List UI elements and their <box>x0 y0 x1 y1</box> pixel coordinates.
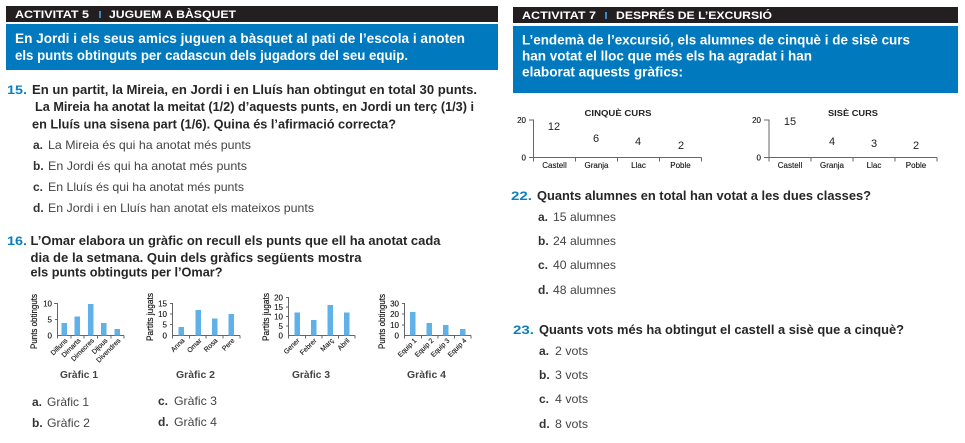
bar chart: gràfic 3: Març <box>320 337 336 353</box>
answer options question 23: a. <box>539 344 549 358</box>
chart: cinquè curs: CINQUÈ CURS <box>584 109 652 118</box>
bar chart: gràfic 4: 20 <box>390 310 400 319</box>
bar chart: gràfic 3: Partits jugats <box>261 293 271 341</box>
bar chart: gràfic 4: Punts obtinguts <box>377 294 387 349</box>
answer options question 23: 3 vots <box>555 368 588 382</box>
heading: activitat 7: DESPRÉS DE L’EXCURSIÓ <box>616 9 772 22</box>
intro text box: activitat 7: elaborat aquests gràfics: <box>522 64 683 80</box>
answer options question 15: d. <box>33 201 44 215</box>
bar chart: gràfic 4: Equip 3 <box>430 337 452 359</box>
heading: activitat 7: ACTIVITAT 7 <box>522 10 596 22</box>
intro text box: activitat 7 <box>513 26 958 93</box>
answer options question 16: a. <box>32 395 42 409</box>
bar chart: gràfic 3: 5 <box>279 322 284 331</box>
chart: cinquè curs: 20 <box>517 116 527 125</box>
question 23: Quants vots més ha obtingut el castell a sisè que a cinquè? <box>539 322 904 337</box>
answer options question 16: Gràfic 3 <box>174 394 217 408</box>
bar chart: gràfic 1: Dijous <box>91 337 110 356</box>
bar chart: gràfic 1: Dimarts <box>61 337 83 359</box>
answer options question 22: 24 alumnes <box>553 234 616 248</box>
answer options question 16 <box>32 394 217 430</box>
chart: sisè curs: 4 <box>829 136 835 148</box>
bar chart: gràfic 4 <box>377 294 471 381</box>
bar chart: gràfic 2: 15 <box>158 300 168 308</box>
bar chart: gràfic 2: Partits jugats <box>145 293 155 341</box>
bar chart: gràfic 2: Rosa <box>203 337 220 354</box>
answer options question 22: d. <box>538 283 549 297</box>
chart: sisè curs: SISÈ CURS <box>828 109 879 118</box>
intro text box: activitat 7: L’endemà de l’excursió, els alumnes de cinquè i de sisè curs <box>522 32 910 48</box>
answer options question 22: a. <box>538 210 548 224</box>
bar chart: gràfic 2 <box>145 293 240 381</box>
chart: sisè curs: 15 <box>784 116 796 128</box>
chart: cinquè curs: 2 <box>678 140 684 152</box>
bar chart: gràfic 3: 10 <box>274 312 284 322</box>
heading: activitat 5: JUGUEM A BÀSQUET <box>109 8 236 21</box>
bar chart: gràfic 2: Gràfic 2 <box>176 369 215 381</box>
question 22: Quants alumnes en total han votat a les dues classes? <box>537 188 871 203</box>
question 16: L’Omar elabora un gràfic on recull els punts que ell ha anotat cada <box>30 233 441 248</box>
answer options question 15: La Mireia és qui ha anotat més punts <box>48 138 251 152</box>
chart: sisè curs: 20 <box>752 116 762 125</box>
answer options question 15: En Jordi és qui ha anotat més punts <box>48 159 247 173</box>
bar chart: gràfic 2: 5 <box>163 320 168 330</box>
chart: cinquè curs: 4 <box>635 136 641 148</box>
answer options question 23: 4 vots <box>555 392 588 406</box>
bar chart: gràfic 3 <box>261 293 355 381</box>
chart: cinquè curs: Poble <box>670 161 691 170</box>
bar chart: gràfic 1 <box>29 294 124 381</box>
chart: cinquè curs: 0 <box>522 154 527 162</box>
answer options question 16: c. <box>158 394 168 408</box>
bar chart: gràfic 1: 10 <box>43 300 53 308</box>
answer options question 15: En Jordi i en Lluís han anotat els mateixos punts <box>48 201 314 215</box>
chart: cinquè curs: Llac <box>631 161 646 170</box>
chart: cinquè curs <box>517 109 702 170</box>
answer options question 16: Gràfic 1 <box>47 395 89 409</box>
answer options question 22: b. <box>538 234 549 248</box>
chart: cinquè curs: Granja <box>584 161 609 170</box>
chart: sisè curs: 2 <box>913 140 919 152</box>
answer options question 16: Gràfic 2 <box>47 416 90 430</box>
heading: activitat 5: ACTIVITAT 5 <box>15 9 89 21</box>
chart: sisè curs: 3 <box>871 138 877 150</box>
answer options question 15: a. <box>33 138 43 152</box>
answer options question 22: 15 alumnes <box>553 210 616 224</box>
chart: cinquè curs: Castell <box>542 161 567 170</box>
chart: sisè curs: Granja <box>820 161 845 170</box>
heading: activitat 7 <box>513 7 958 23</box>
answer options question 23 <box>539 344 588 431</box>
intro text box: activitat 5: els punts obtinguts per cadascun dels jugadors del seu equip. <box>15 48 408 63</box>
bar chart: gràfic 4: 30 <box>390 300 400 308</box>
answer options question 23: c. <box>539 392 549 406</box>
answer options question 22: 48 alumnes <box>553 283 616 297</box>
heading: activitat 5 <box>6 6 498 22</box>
bar chart: gràfic 2: Anna <box>170 337 187 354</box>
answer options question 15 <box>33 138 314 215</box>
answer options question 16: Gràfic 4 <box>174 415 217 429</box>
chart: sisè curs: Poble <box>906 161 927 170</box>
question 15: En un partit, la Mireia, en Jordi i en Lluís han obtingut en total 30 punts. <box>32 82 477 97</box>
chart: sisè curs: Llac <box>867 161 881 170</box>
intro text box: activitat 7: han votat el lloc que més els ha agradat i han <box>522 48 812 64</box>
answer options question 22 <box>538 210 616 297</box>
question 16: 16. <box>7 234 27 248</box>
bar chart: gràfic 1: Punts obtinguts <box>29 294 39 349</box>
bar chart: gràfic 2: 10 <box>158 310 168 319</box>
bar chart: gràfic 2: Omar <box>186 337 204 355</box>
chart: cinquè curs: 6 <box>593 133 599 145</box>
question 16: dia de la setmana. Quin dels gràfics següents mostra <box>30 250 362 265</box>
bar chart: gràfic 3: Gener <box>283 337 302 356</box>
intro text box: activitat 5 <box>6 24 498 70</box>
chart: sisè curs <box>752 109 937 170</box>
bar chart: gràfic 3: 0 <box>279 332 284 340</box>
answer options question 23: 2 vots <box>555 344 588 358</box>
bar chart: gràfic 3: Gràfic 3 <box>292 369 330 381</box>
answer options question 22: 40 alumnes <box>553 258 616 272</box>
question 15: en Lluís una sisena part (1/6). Quina és l’afirmació correcta? <box>32 116 396 132</box>
question 16 <box>7 233 441 280</box>
answer options question 15: c. <box>33 180 43 194</box>
bar chart: gràfic 2: 0 <box>163 332 168 340</box>
question 16: els punts obtinguts per l’Omar? <box>30 264 223 280</box>
chart: sisè curs: 0 <box>757 154 762 162</box>
bar chart: gràfic 3: Febrer <box>299 337 319 357</box>
bar chart: gràfic 3: 15 <box>274 303 284 312</box>
bar chart: gràfic 4: Equip 4 <box>447 337 469 359</box>
bar chart: gràfic 4: Equip 1 <box>397 337 419 359</box>
bar chart: gràfic 4: Gràfic 4 <box>407 369 446 381</box>
answer options question 23: d. <box>539 417 550 431</box>
answer options question 22: c. <box>538 258 548 272</box>
question 15 <box>7 82 477 132</box>
question 15: La Mireia ha anotat la meitat (1/2) d’aquests punts, en Jordi un terç (1/3) i <box>35 99 474 114</box>
answer options question 15: b. <box>33 159 44 173</box>
bar chart: gràfic 1: Divendres <box>96 337 123 364</box>
chart: sisè curs: Castell <box>778 161 802 170</box>
answer options question 16: b. <box>32 416 43 430</box>
bar chart: gràfic 1: 5 <box>48 316 53 324</box>
bar chart: gràfic 3: Abril <box>337 337 352 352</box>
question 23: 23. <box>513 323 534 337</box>
answer options question 16: d. <box>158 415 169 429</box>
chart: cinquè curs: 12 <box>548 121 560 133</box>
panel: activitat 5 <box>6 6 498 430</box>
answer options question 15: En Lluís és qui ha anotat més punts <box>48 180 244 194</box>
bar chart: gràfic 4: 0 <box>395 332 400 340</box>
bar chart: gràfic 1: Gràfic 1 <box>60 369 98 381</box>
answer options question 23: b. <box>539 368 550 382</box>
bar chart: gràfic 4: 10 <box>390 321 400 330</box>
answer options question 23: 8 vots <box>555 417 588 431</box>
panel: activitat 7 <box>511 7 958 431</box>
bar chart: gràfic 2: Pere <box>221 337 237 353</box>
question 15: 15. <box>7 83 27 97</box>
bar chart: gràfic 1: 0 <box>48 332 53 340</box>
intro text box: activitat 5: En Jordi i els seus amics juguen a bàsquet al pati de l’escola i anoten <box>15 31 465 46</box>
bar chart: gràfic 3: 20 <box>274 294 284 302</box>
bar chart: gràfic 1: Dimecres <box>70 337 96 363</box>
bar chart: gràfic 1: Dilluns <box>50 337 70 357</box>
question 22: 22. <box>511 189 532 203</box>
bar chart: gràfic 4: Equip 2 <box>414 337 436 359</box>
